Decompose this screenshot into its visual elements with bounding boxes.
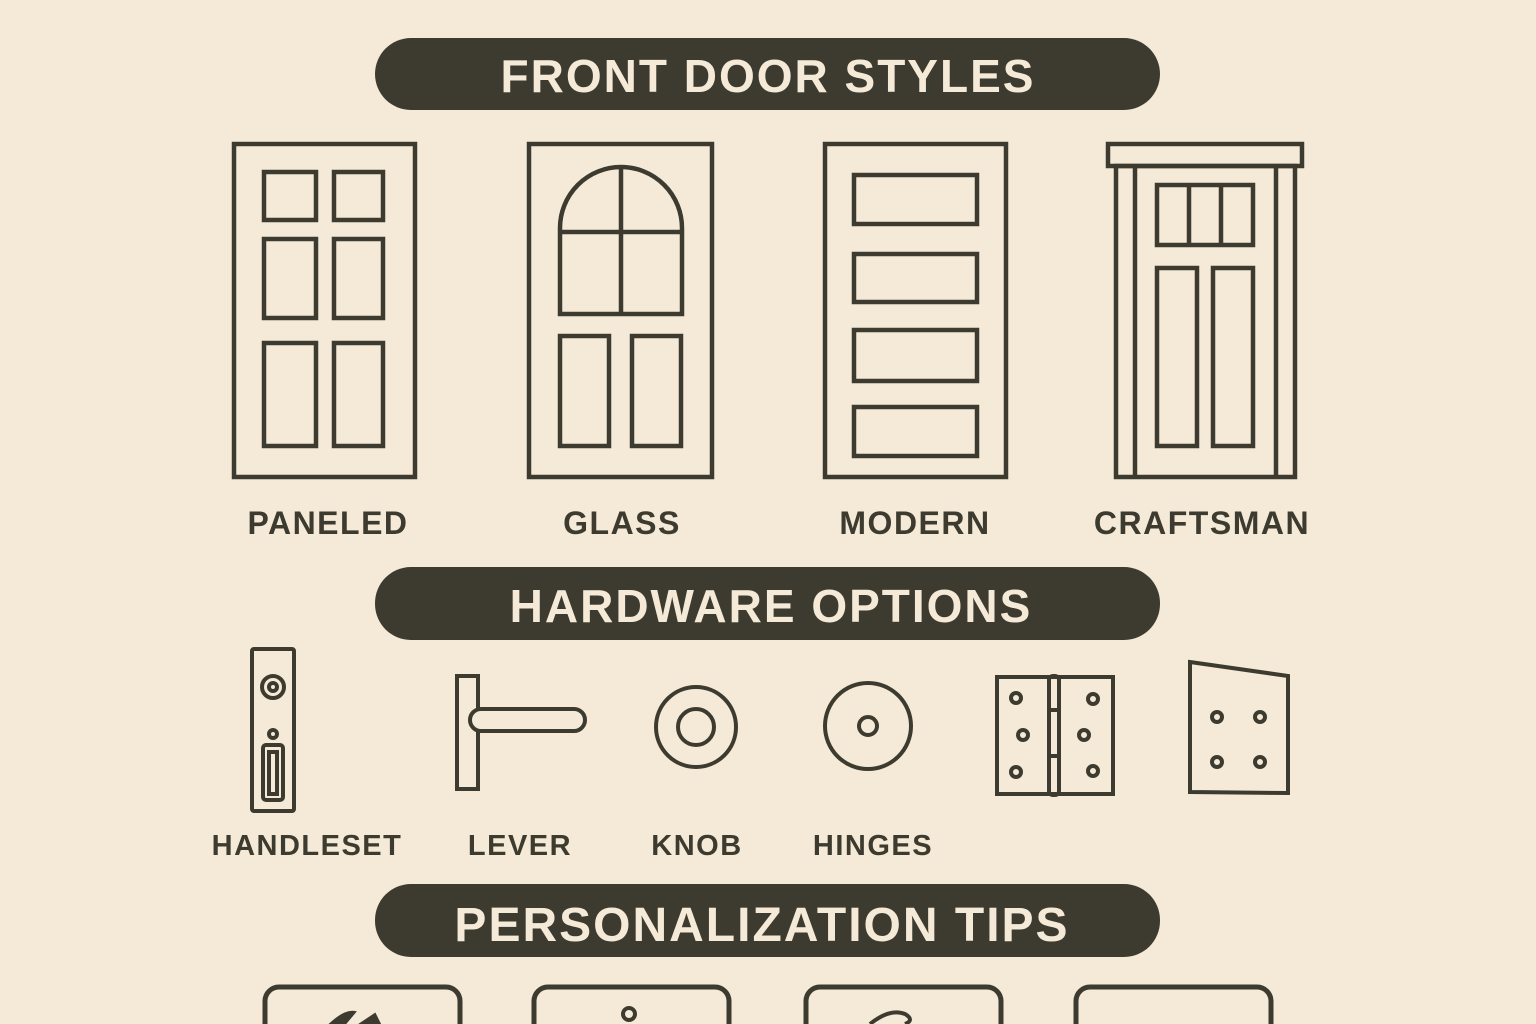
door labels: MODERN [839, 505, 991, 541]
icon: knob [656, 687, 736, 767]
banner: personalization tips: PERSONALIZATION TIPS [454, 899, 1070, 952]
banner: personalization tips [375, 884, 1160, 957]
banner: front door styles [375, 38, 1160, 110]
icon: hinge [997, 676, 1113, 795]
tip cards [265, 987, 1271, 1024]
door: craftsman [1108, 144, 1302, 477]
door labels: PANELED [247, 505, 409, 541]
hardware labels: HINGES [813, 830, 933, 862]
door labels: CRAFTSMAN [1094, 505, 1310, 541]
door labels [247, 505, 1310, 541]
door: modern [825, 144, 1006, 477]
hardware labels: LEVER [468, 830, 572, 862]
hardware labels: HANDLESET [212, 830, 402, 862]
banner: front door styles: FRONT DOOR STYLES [501, 50, 1035, 102]
icon: plate [1190, 662, 1288, 793]
hardware labels [212, 830, 933, 862]
door: paneled [234, 144, 415, 477]
icon: lever [457, 676, 585, 789]
door: glass [529, 144, 712, 477]
banner: hardware options [375, 567, 1160, 640]
icon: handleset [252, 649, 294, 811]
door labels: GLASS [563, 505, 681, 541]
icon: round rose [825, 683, 911, 769]
hardware labels: KNOB [651, 830, 743, 862]
banner: hardware options: HARDWARE OPTIONS [510, 580, 1032, 632]
